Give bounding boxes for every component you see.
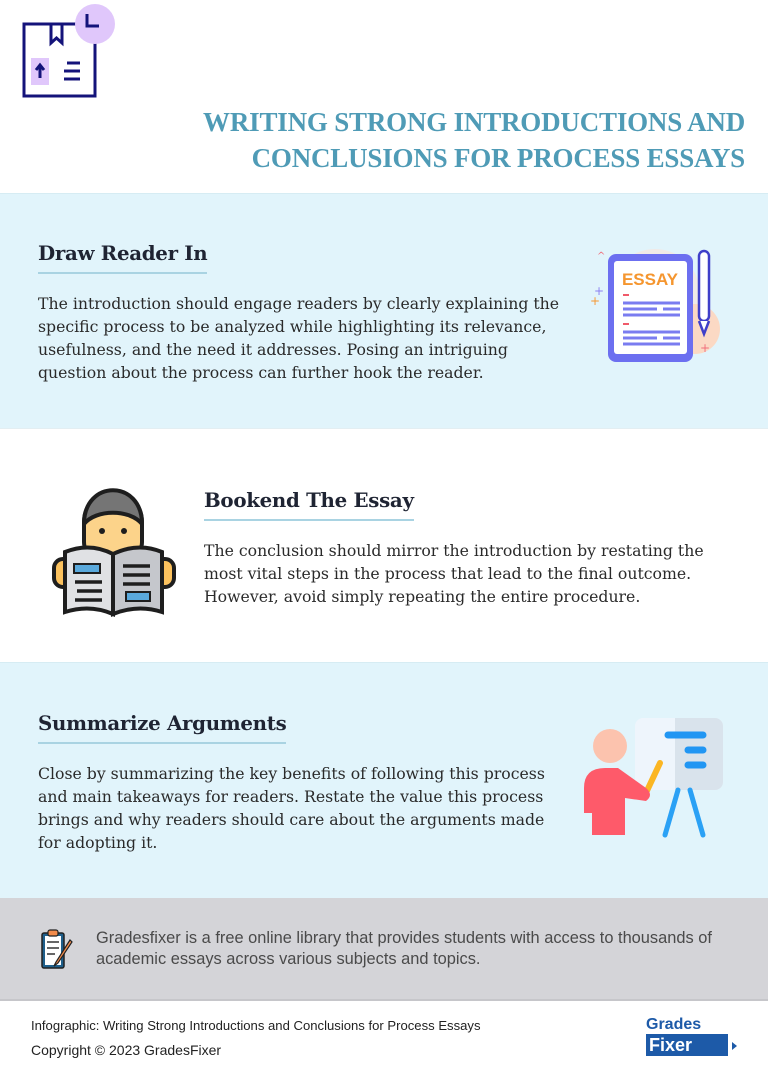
icon: essay tablet: + xyxy=(700,341,710,355)
text block: summarize: Close by summarizing the key benefits of following this process xyxy=(38,764,545,783)
text block: intro xyxy=(38,294,559,382)
icon: clipboard checklist xyxy=(41,929,73,969)
icon: essay tablet: ESSAY xyxy=(622,270,679,289)
logo: GradesFixer xyxy=(646,1016,737,1056)
footer text xyxy=(31,1018,481,1058)
panel: bookend the essay xyxy=(0,428,768,662)
icon: presenter at board xyxy=(584,718,723,838)
text block: conclusion: The conclusion should mirror the introduction by restating the xyxy=(204,541,704,560)
text block: gradesfixer description: Gradesfixer is a free online library that provides students with access to thousands of xyxy=(96,929,712,947)
panel: gradesfixer note xyxy=(0,898,768,1001)
icon: essay tablet xyxy=(590,249,720,362)
logo: GradesFixer: Grades xyxy=(646,1016,701,1033)
text block: intro: specific process to be analyzed while highlighting its relevance, xyxy=(38,317,546,336)
heading: Bookend The Essay: Bookend The Essay xyxy=(204,488,414,512)
text block: conclusion xyxy=(204,541,704,606)
logo: GradesFixer: Fixer xyxy=(649,1035,692,1055)
title: WRITING STRONG INTRODUCTIONS AND xyxy=(203,107,745,137)
text block: summarize: brings and why readers should care about the arguments made xyxy=(38,810,544,829)
text block: intro: question about the process can further hook the reader. xyxy=(38,363,484,382)
icon: person reading newspaper xyxy=(52,488,176,617)
panel: summarize arguments xyxy=(0,662,768,898)
text block: summarize: for adopting it. xyxy=(38,833,157,852)
footer text: Copyright © 2023 GradesFixer xyxy=(31,1042,221,1058)
icon: essay tablet: + xyxy=(594,284,604,298)
icon: document with clock xyxy=(22,4,115,98)
text block: summarize: and main takeaways for readers. Restate the value this process xyxy=(38,787,543,806)
text block: intro: usefulness, and the need it addresses. Posing an intriguing xyxy=(38,340,508,359)
text block: gradesfixer description xyxy=(96,929,712,968)
icon: essay tablet: ^ xyxy=(597,251,605,262)
panel: draw reader in xyxy=(0,193,768,428)
heading: Draw Reader In: Draw Reader In xyxy=(38,241,207,265)
text block: summarize xyxy=(38,764,545,852)
footer text: Infographic: Writing Strong Introductions and Conclusions for Process Essays xyxy=(31,1018,481,1033)
title: CONCLUSIONS FOR PROCESS ESSAYS xyxy=(252,143,745,173)
text block: conclusion: most vital steps in the process that lead to the final outcome. xyxy=(204,564,691,583)
heading: Summarize Arguments: Summarize Arguments xyxy=(38,711,286,735)
icon: essay tablet: + xyxy=(590,294,600,308)
title xyxy=(203,107,745,173)
text block: conclusion: However, avoid simply repeating the entire procedure. xyxy=(204,587,640,606)
text block: intro: The introduction should engage readers by clearly explaining the xyxy=(38,294,559,313)
text block: gradesfixer description: academic essays across various subjects and topics. xyxy=(96,950,480,968)
